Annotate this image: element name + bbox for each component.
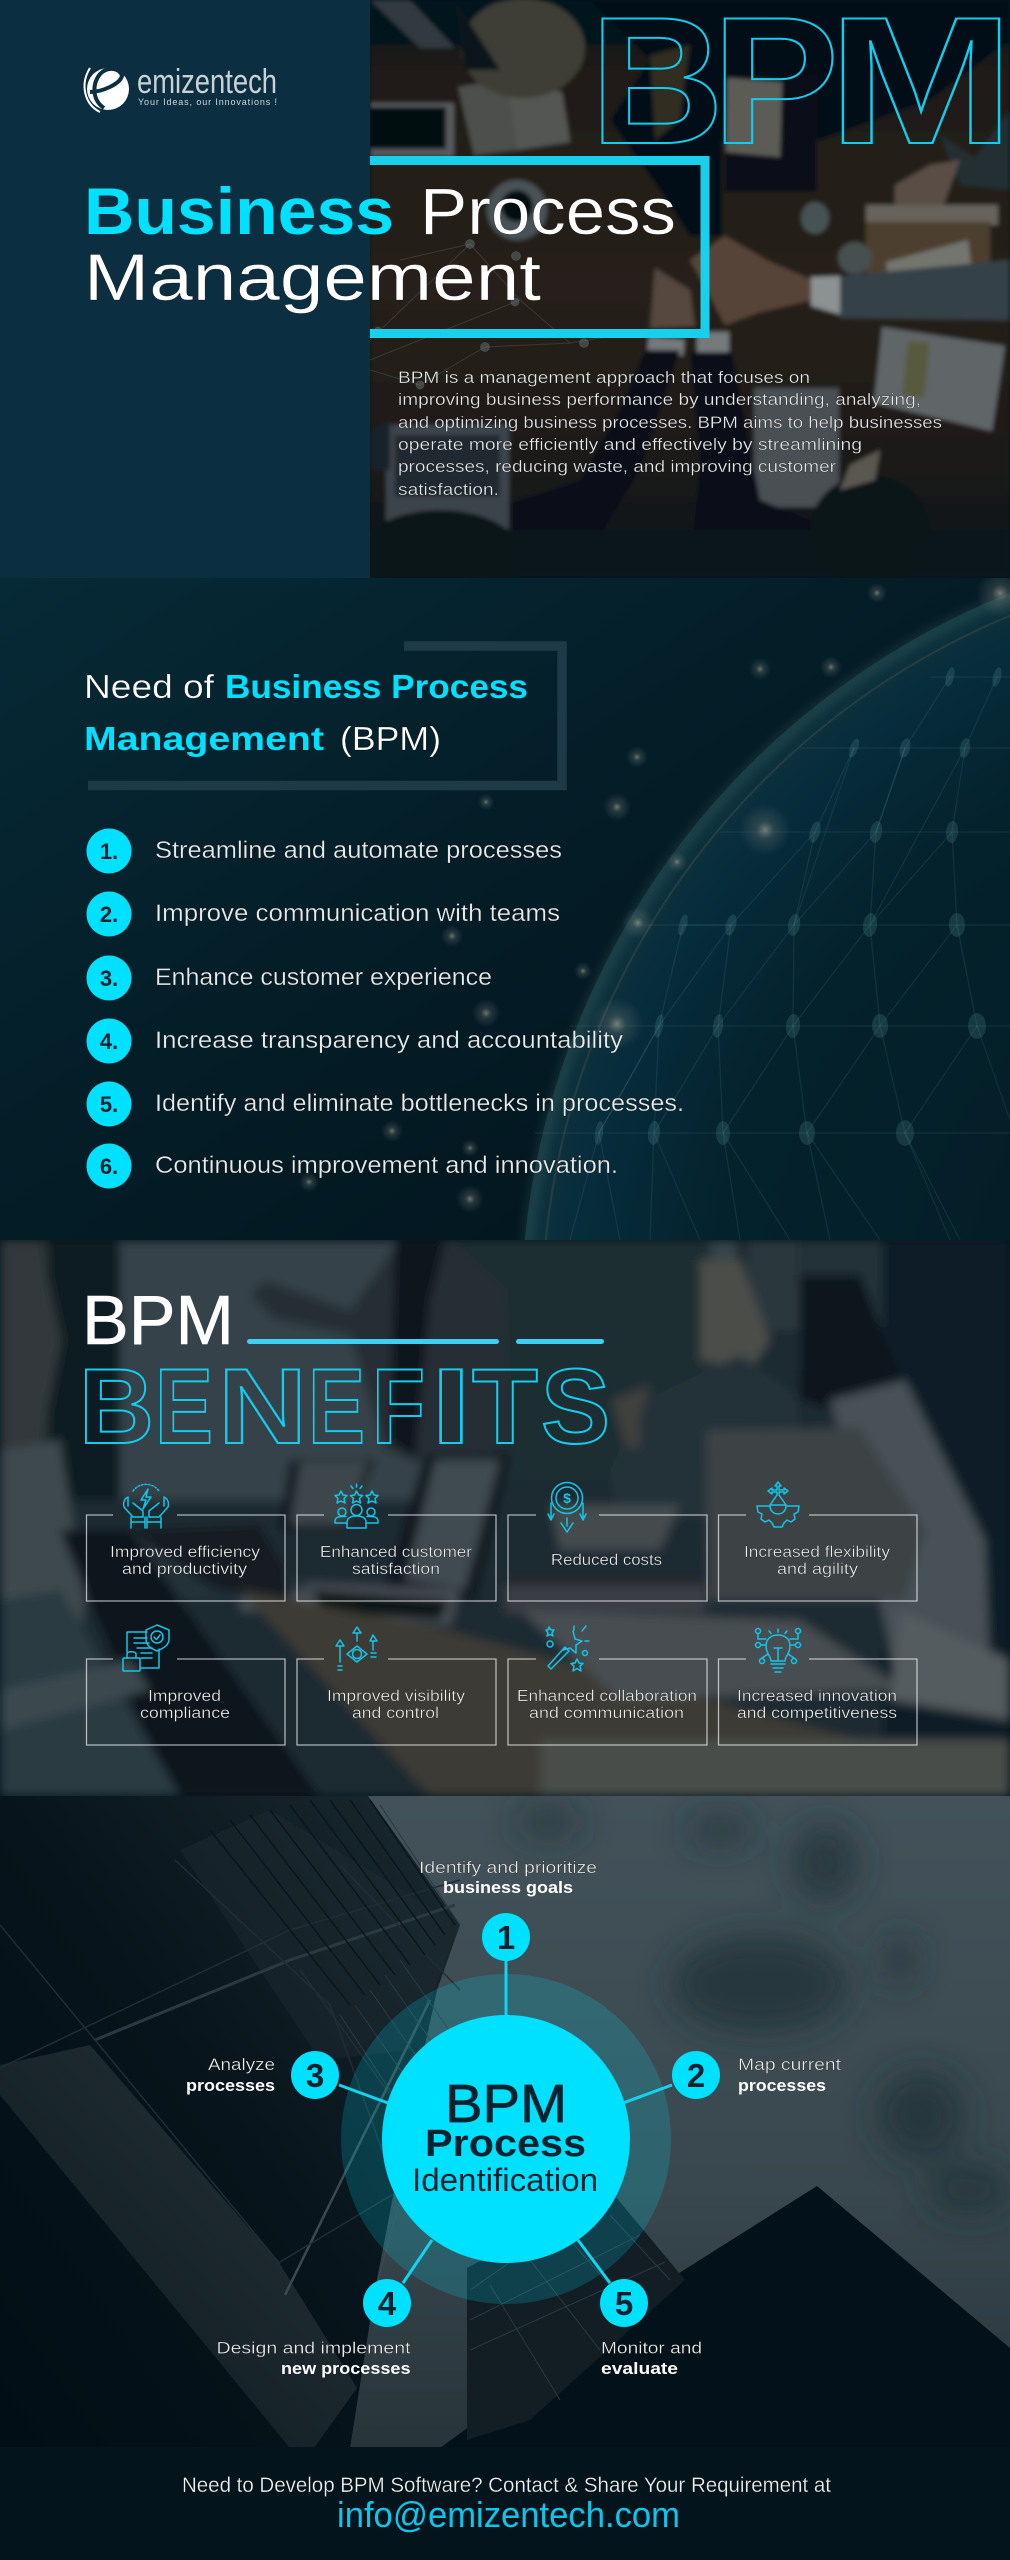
box	[86, 1659, 285, 1745]
benefit: visibility	[297, 1627, 496, 1745]
text	[737, 1688, 897, 1722]
list item 6	[86, 1144, 618, 1188]
outlined BENEFITS: E	[155, 1346, 213, 1466]
list item 3: Enhance customer experience	[155, 964, 492, 991]
benefit: flexibility	[718, 1482, 917, 1601]
list item 6: Continuous improvement and innovation.	[155, 1152, 618, 1179]
text	[320, 1544, 472, 1578]
box	[297, 1659, 496, 1745]
step 4: 4	[378, 2285, 397, 2322]
step 5: 5	[615, 2285, 633, 2322]
text	[140, 1688, 230, 1722]
intro paragraph	[398, 368, 942, 499]
box	[718, 1659, 917, 1745]
benefit: reduced costs	[508, 1482, 707, 1601]
outlined BENEFITS: S	[541, 1346, 610, 1466]
title: Business	[84, 174, 394, 248]
title	[84, 174, 676, 314]
list item 5	[86, 1082, 684, 1126]
right dark peak	[440, 2186, 1010, 2448]
list item 4: 4.	[100, 1029, 118, 1054]
list item 6: 6.	[100, 1154, 118, 1179]
hero network mesh	[370, 239, 603, 390]
outlined BENEFITS	[79, 1346, 610, 1466]
benefit: collaboration	[508, 1626, 707, 1745]
list item 1	[86, 828, 562, 874]
text: Enhanced customer	[320, 1544, 472, 1561]
text: and competitiveness	[737, 1705, 897, 1722]
need heading: Business Process	[225, 668, 528, 705]
intro paragraph: satisfaction.	[398, 480, 499, 499]
title: Management	[84, 240, 541, 314]
step 3	[186, 2051, 339, 2099]
icon: coin with down arrows	[548, 1482, 586, 1532]
step 2: processes	[738, 2076, 826, 2095]
center circle: BPM	[445, 2074, 567, 2134]
text: Improved	[148, 1688, 221, 1705]
benefits heading	[79, 1281, 610, 1466]
step 5	[600, 2279, 702, 2378]
outlined BENEFITS: N	[218, 1346, 307, 1466]
globe illustration	[521, 590, 1010, 1240]
hero left colour panel	[0, 0, 370, 578]
step 4: new processes	[281, 2359, 410, 2378]
benefits office photo	[0, 1240, 1010, 1796]
text: Increased innovation	[737, 1688, 897, 1705]
text	[327, 1688, 465, 1722]
step 4: Design and implement	[216, 2338, 411, 2358]
text: Improved efficiency	[110, 1544, 260, 1561]
sky and buildings photo	[0, 1796, 1010, 2448]
intro paragraph: improving business performance by understanding, analyzing,	[398, 390, 921, 409]
icon: hands with bolt	[124, 1484, 168, 1528]
panel: need of BPM	[0, 578, 1010, 1240]
list item 4: Increase transparency and accountability	[155, 1027, 623, 1054]
outlined BENEFITS: I	[431, 1346, 471, 1466]
icon: people with stars	[335, 1484, 378, 1528]
list item 5: 5.	[100, 1092, 118, 1117]
box	[508, 1515, 707, 1601]
list item 2: 2.	[100, 902, 118, 927]
title frame	[370, 160, 705, 334]
BPM white label: BPM	[82, 1281, 234, 1359]
text	[744, 1544, 890, 1578]
benefit: innovation	[718, 1628, 917, 1745]
logo tagline: Your Ideas, our Innovations !	[138, 97, 277, 107]
intro paragraph: BPM is a management approach that focuses on	[398, 368, 810, 387]
panel: footer	[0, 2447, 1010, 2560]
icon: magic wand	[546, 1626, 589, 1671]
box	[297, 1515, 496, 1601]
list item 3: 3.	[100, 966, 118, 991]
box	[718, 1515, 917, 1601]
distant tower	[467, 2190, 685, 2440]
outlined BENEFITS: E	[308, 1346, 365, 1466]
box	[508, 1659, 707, 1745]
text: and agility	[777, 1561, 858, 1578]
step 1: 1	[497, 1919, 515, 1956]
step 5: Monitor and	[601, 2338, 702, 2358]
hero meeting table photo	[370, 0, 1010, 532]
step 2: Map current	[738, 2055, 841, 2074]
text: Improved visibility	[327, 1688, 465, 1705]
text: and productivity	[122, 1561, 247, 1578]
footer call to action: Need to Develop BPM Software? Contact & Share Your Requirement at	[182, 2474, 831, 2497]
title: Process	[420, 174, 676, 248]
outlined BENEFITS: F	[372, 1346, 425, 1466]
text: Reduced costs	[551, 1552, 662, 1569]
process connectors	[339, 1960, 672, 2283]
step 1	[419, 1858, 597, 1961]
need panel background	[0, 578, 1010, 1240]
step 2	[672, 2051, 841, 2099]
icon: coin with down arrows: $	[563, 1490, 571, 1506]
step 3: 3	[306, 2057, 324, 2094]
step 3: Analyze	[208, 2055, 275, 2074]
list item 1: 1.	[100, 839, 118, 864]
logo wordmark: emizentech	[137, 63, 277, 101]
step 1: Identify and prioritize	[419, 1858, 597, 1877]
benefit: efficiency	[86, 1484, 285, 1601]
text: satisfaction	[352, 1561, 440, 1578]
need heading: Management	[84, 720, 324, 757]
intro paragraph: processes, reducing waste, and improving customer	[398, 457, 836, 476]
step 2: 2	[687, 2057, 705, 2094]
text: and control	[352, 1705, 439, 1722]
logo mark	[85, 68, 129, 112]
heading frame	[88, 646, 562, 786]
left glass building	[0, 1796, 470, 2448]
text: Increased flexibility	[744, 1544, 890, 1561]
logo: emizentech	[85, 63, 277, 112]
need heading: (BPM)	[340, 720, 441, 757]
text: compliance	[140, 1705, 230, 1722]
icon: eye with arrows	[336, 1627, 377, 1670]
list item 5: Identify and eliminate bottlenecks in processes.	[155, 1090, 684, 1117]
need heading: Need of	[84, 668, 215, 705]
list item 3	[86, 956, 492, 1000]
text	[517, 1688, 697, 1722]
list item 2: Improve communication with teams	[155, 900, 560, 927]
intro paragraph: operate more efficiently and effectively by streamlining	[398, 435, 862, 454]
list item 2	[86, 892, 560, 936]
icon: gear with arrows	[757, 1482, 799, 1527]
icon: document with shield	[123, 1625, 169, 1671]
benefit: compliance	[86, 1625, 285, 1745]
box	[86, 1515, 285, 1601]
step 4	[216, 2279, 411, 2378]
glowing particles	[299, 569, 1010, 1213]
step 1: business goals	[443, 1878, 573, 1897]
icon: light bulb network	[756, 1628, 800, 1672]
list item 1: Streamline and automate processes	[155, 837, 562, 864]
panel: benefits	[0, 1240, 1010, 1796]
panel: process identification	[0, 1796, 1010, 2448]
list item 4	[86, 1018, 623, 1064]
text	[110, 1544, 260, 1578]
panel: hero	[0, 0, 1010, 610]
benefit: customer satisfaction	[297, 1484, 496, 1601]
process halo	[341, 1974, 671, 2304]
need heading	[84, 668, 528, 757]
center circle: Identification	[412, 2162, 598, 2198]
outlined BPM heading	[590, 0, 1010, 182]
text: and communication	[529, 1705, 684, 1722]
center circle: Process	[425, 2123, 586, 2165]
footer email: info@emizentech.com	[337, 2494, 680, 2535]
step 5: evaluate	[601, 2359, 678, 2378]
center circle	[382, 2015, 630, 2263]
outlined BENEFITS: T	[472, 1346, 538, 1466]
outlined BENEFITS: B	[79, 1346, 154, 1466]
intro paragraph: and optimizing business processes. BPM aims to help businesses	[398, 413, 942, 432]
text: Enhanced collaboration	[517, 1688, 697, 1705]
footer background	[0, 2447, 1010, 2560]
need list	[86, 828, 684, 1188]
step 3: processes	[186, 2076, 275, 2095]
heading rule	[247, 1339, 604, 1344]
